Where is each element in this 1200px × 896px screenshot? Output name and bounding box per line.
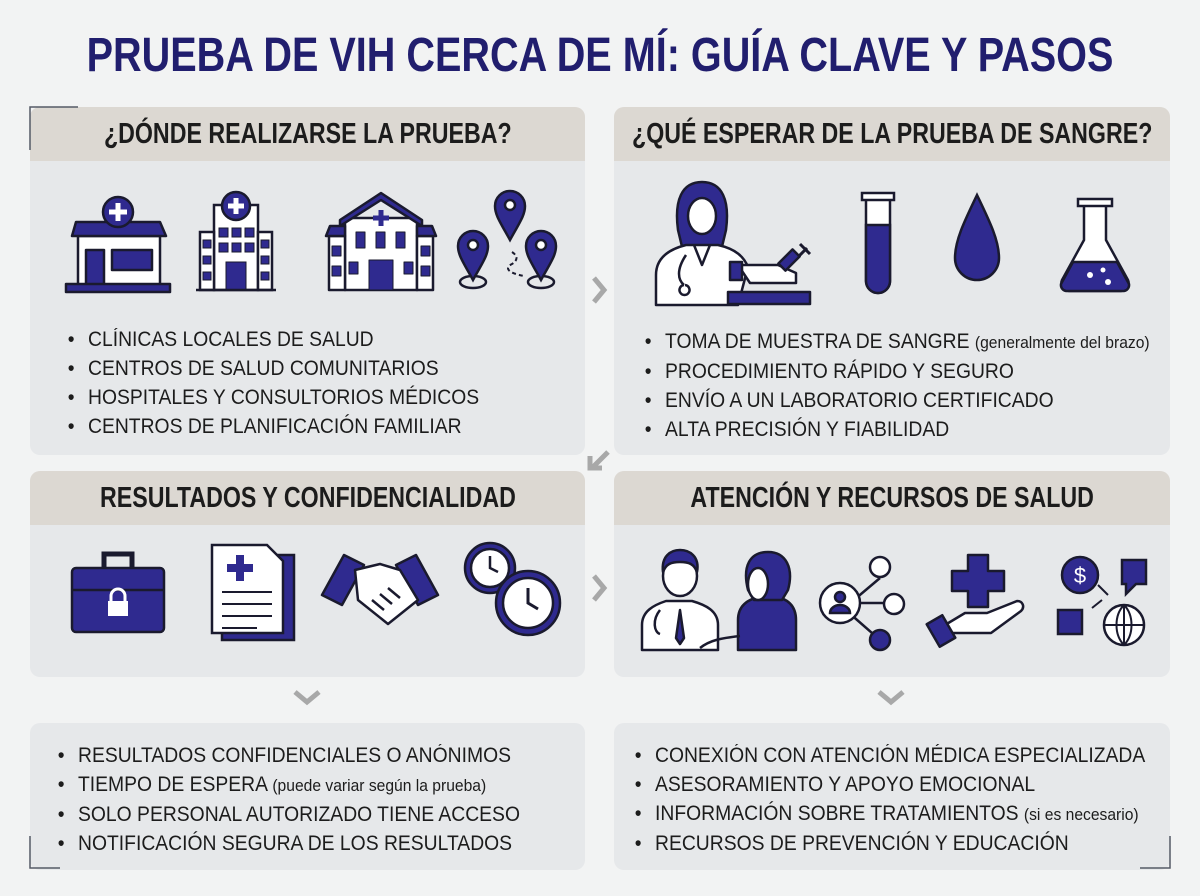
icon: hand with cross <box>927 555 1023 647</box>
panel: care details <box>614 723 1170 870</box>
heading: blood test <box>614 107 1170 161</box>
panel: where to get tested <box>30 107 585 455</box>
icon: money and globe <box>1058 557 1146 645</box>
heading: care: ATENCIÓN Y RECURSOS DE SALUD <box>690 482 1094 514</box>
list: care details: CONEXIÓN CON ATENCIÓN MÉDICA ESPECIALIZADA <box>655 744 1145 767</box>
panel: results <box>30 471 585 677</box>
icon: hospital building <box>196 192 276 290</box>
list: care details <box>636 744 1146 855</box>
icon: test tube <box>862 193 894 293</box>
list: blood test steps: ENVÍO A UN LABORATORIO CERTIFICADO <box>665 389 1054 412</box>
list: results details <box>58 744 520 855</box>
icon: clinic <box>66 197 170 292</box>
list: places: CLÍNICAS LOCALES DE SALUD <box>88 328 374 351</box>
icon: map pins <box>458 191 556 288</box>
panel: results details <box>30 723 585 870</box>
list: places: CENTROS DE SALUD COMUNITARIOS <box>88 357 439 380</box>
list: blood test steps <box>646 330 1150 441</box>
list: care details: RECURSOS DE PREVENCIÓN Y EDUCACIÓN <box>655 832 1069 855</box>
icon: medical document <box>212 545 294 640</box>
icon: flask <box>1061 199 1129 291</box>
arrow: down left <box>295 692 319 702</box>
list: places: CENTROS DE PLANIFICACIÓN FAMILIAR <box>88 415 462 438</box>
icon: clocks <box>465 543 560 635</box>
heading: results: RESULTADOS Y CONFIDENCIALIDAD <box>100 482 515 514</box>
icon: network <box>820 557 904 650</box>
heading: where: ¿DÓNDE REALIZARSE LA PRUEBA? <box>104 118 511 150</box>
arrow: diagonal <box>590 452 608 468</box>
list: blood test steps: TOMA DE MUESTRA DE SANGRE (generalmente del brazo) <box>665 330 1150 353</box>
arrow: right top <box>594 278 604 302</box>
list: results details: SOLO PERSONAL AUTORIZADO TIENE ACCESO <box>78 803 520 826</box>
icon: blood drop <box>955 195 999 280</box>
list: blood test steps: ALTA PRECISIÓN Y FIABILIDAD <box>665 418 949 441</box>
list: care details: INFORMACIÓN SOBRE TRATAMIENTOS (si es necesario) <box>655 802 1139 825</box>
icon: nurse drawing blood <box>656 182 810 305</box>
list: results details: TIEMPO DE ESPERA (puede variar según la prueba) <box>78 773 486 796</box>
heading: where <box>30 107 585 161</box>
title: PRUEBA DE VIH CERCA DE MÍ: GUÍA CLAVE Y PASOS <box>87 29 1113 82</box>
heading: care <box>614 471 1170 525</box>
arrow: down right <box>879 692 903 702</box>
panel: care <box>614 471 1170 677</box>
heading: results <box>30 471 585 525</box>
arrow: right middle <box>594 576 604 600</box>
list: places: HOSPITALES Y CONSULTORIOS MÉDICOS <box>88 386 479 409</box>
list: results details: RESULTADOS CONFIDENCIALES O ANÓNIMOS <box>78 744 511 767</box>
list: care details: ASESORAMIENTO Y APOYO EMOCIONAL <box>655 773 1035 796</box>
heading: blood test: ¿QUÉ ESPERAR DE LA PRUEBA DE SANGRE? <box>632 118 1152 150</box>
list: results details: NOTIFICACIÓN SEGURA DE LOS RESULTADOS <box>78 832 512 855</box>
list: blood test steps: PROCEDIMIENTO RÁPIDO Y SEGURO <box>665 360 1014 383</box>
icon: money and globe: $ <box>1074 563 1086 588</box>
panel: blood test <box>614 107 1170 455</box>
icon: handshake <box>322 555 438 624</box>
icon: doctor and patient <box>642 550 796 650</box>
icon: briefcase <box>72 554 164 632</box>
icon: hospital with roof <box>326 193 436 290</box>
list: places <box>68 328 479 438</box>
